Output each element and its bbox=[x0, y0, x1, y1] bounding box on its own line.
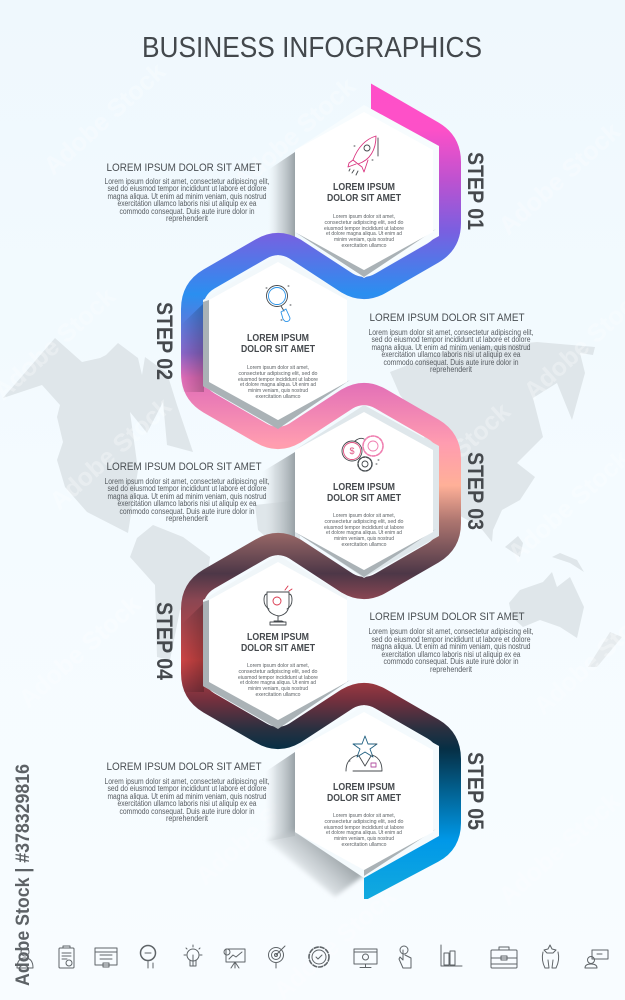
icon: people bbox=[17, 948, 33, 968]
text block: step 01 description: LOREM IPSUM DOLOR SIT AMET bbox=[106, 162, 262, 174]
panel: step 02: DOLOR SIT AMET bbox=[241, 344, 315, 355]
label: step 05: STEP 05 bbox=[463, 752, 488, 830]
text block: step 02 description: sed do eiusmod tempor incididunt ut labore et dolore bbox=[372, 335, 531, 344]
text block: step 05 description: reprehenderit bbox=[166, 814, 209, 823]
ribbon band bbox=[192, 87, 450, 896]
text block: step 01 description: sed do eiusmod tempor incididunt ut labore et dolore bbox=[108, 184, 267, 193]
hexagon cast shadows bbox=[262, 152, 368, 897]
text block: step 04 description: LOREM IPSUM DOLOR SIT AMET bbox=[370, 611, 525, 623]
text block: step 04 description bbox=[368, 611, 534, 674]
panel: step 01: eiusmod tempor incididunt ut labore bbox=[324, 226, 404, 232]
icon: touch hand bbox=[399, 946, 411, 968]
panel: step 03: exercitation ullamco bbox=[342, 542, 386, 548]
panel: step 04: consectetur adipiscing elit, sed do bbox=[238, 669, 318, 675]
panel: step 04 bbox=[203, 555, 350, 729]
text block: step 05 description: LOREM IPSUM DOLOR SIT AMET bbox=[106, 761, 262, 773]
icon: hands with star bbox=[542, 945, 559, 968]
panel: step 02: LOREM IPSUM bbox=[247, 333, 309, 344]
text block: step 03 description: commodo consequat. Duis aute irure dolor in bbox=[120, 507, 254, 516]
label: step 04: STEP 04 bbox=[152, 602, 177, 681]
panel: step 03: DOLOR SIT AMET bbox=[327, 493, 401, 504]
watermarks: Adobe Stock bbox=[494, 787, 625, 911]
text block: step 01 description: commodo consequat. Duis aute irure dolor in bbox=[120, 207, 254, 216]
text block: step 05 description: Lorem ipsum dolor sit amet, consectetur adipiscing elit, bbox=[104, 777, 270, 786]
panel: step 02: exercitation ullamco bbox=[256, 394, 300, 400]
icon: light bulb bbox=[184, 945, 202, 966]
icon: monitor bbox=[354, 949, 377, 968]
icon: gears and coin bbox=[342, 436, 383, 471]
ribbon fold shading bbox=[181, 303, 204, 692]
panel: step 03: consectetur adipiscing elit, sed do bbox=[324, 519, 404, 525]
icon: gear bbox=[309, 947, 329, 967]
panel: step 05 bbox=[295, 705, 439, 878]
text block: step 05 description: sed do eiusmod tempor incididunt ut labore et dolore bbox=[108, 784, 267, 793]
text block: step 05 description: commodo consequat. Duis aute irure dolor in bbox=[120, 807, 254, 816]
text block: step 05 description bbox=[104, 761, 270, 823]
text block: step 01 description: reprehenderit bbox=[166, 214, 209, 223]
text block: step 05 description: magna aliqua. Ut enim ad minim veniam, quis nostrud bbox=[108, 792, 266, 801]
text block: step 03 description: Lorem ipsum dolor sit amet, consectetur adipiscing elit, bbox=[104, 477, 270, 486]
panel: step 05: consectetur adipiscing elit, sed do bbox=[324, 819, 404, 825]
text block: step 03 description bbox=[104, 461, 270, 523]
panel: step 04: LOREM IPSUM bbox=[247, 632, 309, 643]
panel: step 05: DOLOR SIT AMET bbox=[327, 793, 401, 804]
panel: step 05: LOREM IPSUM bbox=[333, 782, 395, 793]
text block: step 03 description: LOREM IPSUM DOLOR SIT AMET bbox=[106, 461, 262, 473]
text block: step 03 description: exercitation ullamco laboris nisi ut aliquip ex ea bbox=[118, 499, 257, 508]
text block: step 04 description: reprehenderit bbox=[430, 665, 473, 674]
panel: step 04: DOLOR SIT AMET bbox=[241, 643, 315, 654]
panel: step 03: et dolore magna aliqua. Ut enim ad bbox=[326, 530, 402, 536]
stock credit: Adobe Stock | #378329816 bbox=[13, 764, 34, 986]
text block: step 04 description: magna aliqua. Ut enim ad minim veniam, quis nostrud bbox=[372, 642, 530, 651]
icon: star and hill bbox=[346, 736, 382, 771]
icon: magnifier bbox=[266, 286, 291, 322]
icon: person with chat bbox=[585, 950, 608, 968]
text block: step 02 description: reprehenderit bbox=[430, 365, 473, 374]
text block: step 02 description bbox=[368, 312, 534, 374]
panel: step 04: exercitation ullamco bbox=[256, 692, 300, 698]
icon: briefcase bbox=[491, 947, 517, 968]
panel: step 04: et dolore magna aliqua. Ut enim ad bbox=[240, 680, 316, 686]
panel: step 03 bbox=[295, 405, 439, 578]
text block: step 02 description: magna aliqua. Ut enim ad minim veniam, quis nostrud bbox=[372, 343, 530, 352]
label: step 01: STEP 01 bbox=[463, 152, 488, 230]
panel: step 01: DOLOR SIT AMET bbox=[327, 193, 401, 204]
icon: dollar magnifier bbox=[140, 946, 156, 968]
text block: step 04 description: exercitation ullamco laboris nisi ut aliquip ex ea bbox=[382, 650, 521, 659]
icon: presentation chart bbox=[224, 949, 245, 968]
panel: step 02: eiusmod tempor incididunt ut labore bbox=[238, 377, 318, 383]
panel: step 01: LOREM IPSUM bbox=[333, 182, 395, 193]
text block: step 04 description: sed do eiusmod tempor incididunt ut labore et dolore bbox=[372, 635, 531, 644]
icon: gears and coin: $ bbox=[349, 446, 355, 456]
panel: step 02: et dolore magna aliqua. Ut enim ad bbox=[240, 382, 316, 388]
watermarks: Adobe Stock bbox=[39, 57, 171, 181]
text block: step 02 description: Lorem ipsum dolor sit amet, consectetur adipiscing elit, bbox=[368, 328, 534, 337]
icon: trophy bbox=[264, 586, 292, 625]
panel: step 02: minim veniam, quis nostrud bbox=[248, 388, 308, 394]
watermarks: Adobe Stock bbox=[45, 392, 177, 516]
panel: step 02: Lorem ipsum dolor sit amet, bbox=[247, 365, 309, 371]
panel: step 04: Lorem ipsum dolor sit amet, bbox=[247, 663, 309, 669]
icon: target bbox=[268, 946, 285, 968]
panel: step 01: et dolore magna aliqua. Ut enim ad bbox=[326, 231, 402, 237]
text block: step 02 description: LOREM IPSUM DOLOR SIT AMET bbox=[370, 312, 525, 324]
panel: step 03: LOREM IPSUM bbox=[333, 482, 395, 493]
title: BUSINESS INFOGRAPHICS bbox=[142, 32, 482, 64]
panel: step 03: Lorem ipsum dolor sit amet, bbox=[333, 513, 395, 519]
panel: step 01: Lorem ipsum dolor sit amet, bbox=[333, 214, 395, 220]
text block: step 01 description bbox=[104, 162, 270, 223]
panel: step 02: consectetur adipiscing elit, sed do bbox=[238, 371, 318, 377]
panel: step 03: minim veniam, quis nostrud bbox=[334, 536, 394, 542]
icon: clipboard bbox=[59, 946, 74, 968]
panel: step 05: Lorem ipsum dolor sit amet, bbox=[333, 813, 395, 819]
icon: browser window bbox=[95, 948, 117, 967]
text block: step 01 description: magna aliqua. Ut enim ad minim veniam, quis nostrud bbox=[108, 192, 266, 201]
panel: step 03: eiusmod tempor incididunt ut labore bbox=[324, 525, 404, 531]
watermarks: Adobe Stock bbox=[494, 117, 625, 241]
text block: step 05 description: exercitation ullamco laboris nisi ut aliquip ex ea bbox=[118, 799, 257, 808]
panel: step 05: eiusmod tempor incididunt ut labore bbox=[324, 825, 404, 831]
watermarks: Adobe Stock bbox=[14, 590, 146, 714]
panel: step 05: exercitation ullamco bbox=[342, 842, 386, 848]
text block: step 02 description: exercitation ullamco laboris nisi ut aliquip ex ea bbox=[382, 350, 521, 359]
watermarks: Adobe Stock bbox=[229, 72, 361, 196]
panel: step 01: consectetur adipiscing elit, sed do bbox=[324, 220, 404, 226]
label: step 03: STEP 03 bbox=[463, 452, 488, 530]
text block: step 02 description: commodo consequat. Duis aute irure dolor in bbox=[384, 358, 518, 367]
panel: step 04: minim veniam, quis nostrud bbox=[248, 686, 308, 692]
text block: step 04 description: commodo consequat. Duis aute irure dolor in bbox=[384, 657, 518, 666]
panel: step 01: minim veniam, quis nostrud bbox=[334, 237, 394, 243]
icon: bar chart bbox=[441, 945, 462, 966]
panel: step 05: minim veniam, quis nostrud bbox=[334, 836, 394, 842]
text block: step 01 description: Lorem ipsum dolor sit amet, consectetur adipiscing elit, bbox=[104, 177, 270, 186]
text block: step 03 description: reprehenderit bbox=[166, 514, 209, 523]
text block: step 03 description: magna aliqua. Ut enim ad minim veniam, quis nostrud bbox=[108, 492, 266, 501]
panel: step 02 bbox=[203, 255, 350, 429]
watermarks: Adobe Stock bbox=[384, 397, 516, 521]
text block: step 03 description: sed do eiusmod tempor incididunt ut labore et dolore bbox=[108, 484, 267, 493]
text block: step 04 description: Lorem ipsum dolor sit amet, consectetur adipiscing elit, bbox=[368, 627, 534, 636]
text block: step 01 description: exercitation ullamco laboris nisi ut aliquip ex ea bbox=[118, 199, 257, 208]
world map bbox=[3, 338, 622, 667]
panel: step 05: et dolore magna aliqua. Ut enim ad bbox=[326, 830, 402, 836]
panel: step 01: exercitation ullamco bbox=[342, 243, 386, 249]
label: step 02: STEP 02 bbox=[152, 302, 177, 380]
watermarks: Adobe Stock bbox=[191, 767, 323, 891]
panel: step 01 bbox=[295, 105, 439, 278]
panel: step 04: eiusmod tempor incididunt ut labore bbox=[238, 675, 318, 681]
icon: rocket bbox=[348, 136, 378, 175]
icon row bbox=[17, 945, 608, 968]
